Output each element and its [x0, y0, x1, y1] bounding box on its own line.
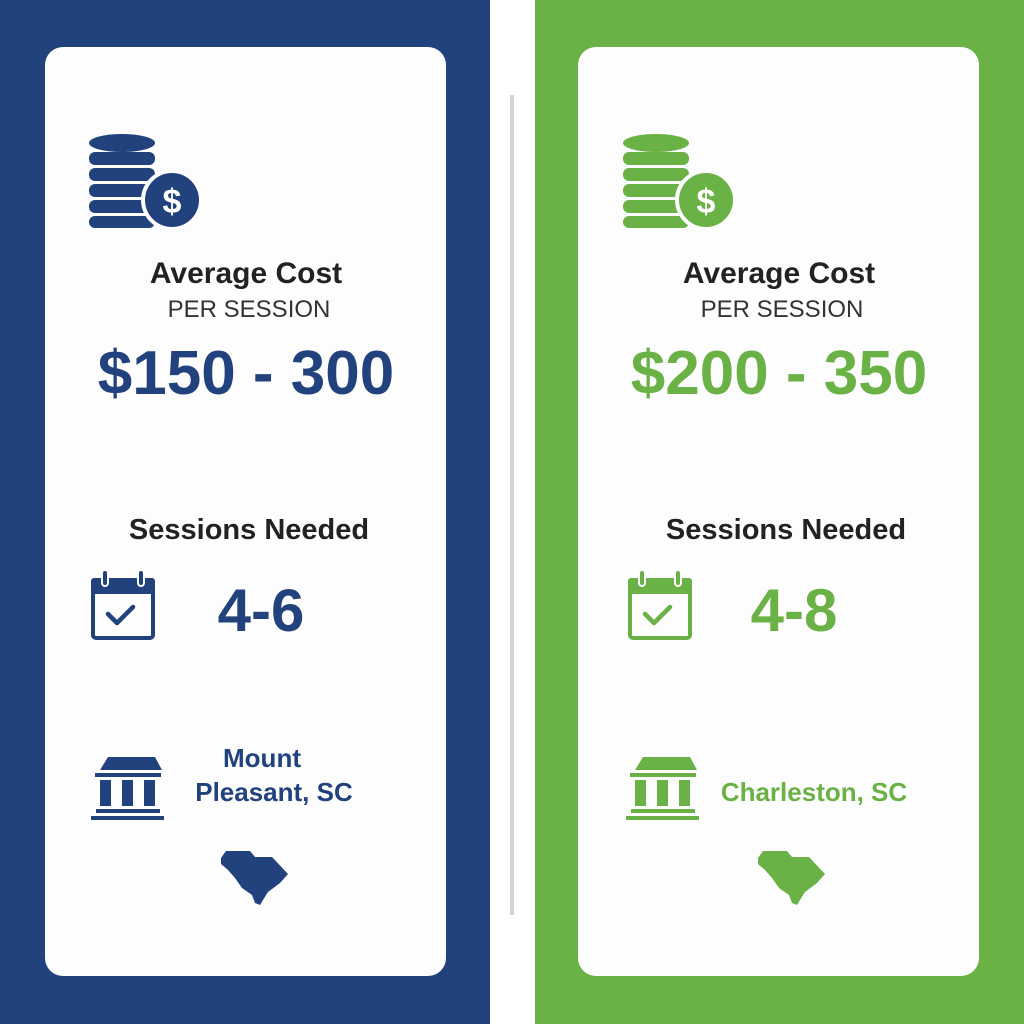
icon: coins: $ [697, 183, 716, 221]
sessions value: 4-8 [751, 577, 837, 644]
subheading: per session: PER SESSION [168, 296, 330, 323]
location text [195, 743, 353, 807]
sessions value: 4-6 [218, 577, 304, 644]
panel: Mount Pleasant [45, 47, 446, 976]
icon: SC map [221, 851, 288, 905]
heading: Sessions Needed: Sessions Needed [666, 514, 906, 546]
icon: building [91, 757, 164, 820]
heading: Sessions Needed: Sessions Needed [129, 514, 369, 546]
icon: SC map [758, 851, 825, 905]
cost value: $200 - 350 [631, 339, 927, 408]
panel: Charleston [578, 47, 979, 976]
icon: building [626, 757, 699, 820]
icon: coins: $ [163, 183, 182, 221]
icon: calendar [91, 570, 155, 638]
icon: calendar [628, 570, 692, 638]
heading: Average Cost: Average Cost [150, 257, 342, 290]
icon: coins [623, 134, 737, 231]
heading: Average Cost: Average Cost [683, 257, 875, 290]
cost value: $150 - 300 [98, 339, 394, 408]
location text: Charleston, SC [721, 777, 907, 807]
location text: Mount [223, 743, 301, 773]
location text: Pleasant, SC [195, 777, 353, 807]
subheading: per session: PER SESSION [701, 296, 863, 323]
icon: coins [89, 134, 203, 231]
